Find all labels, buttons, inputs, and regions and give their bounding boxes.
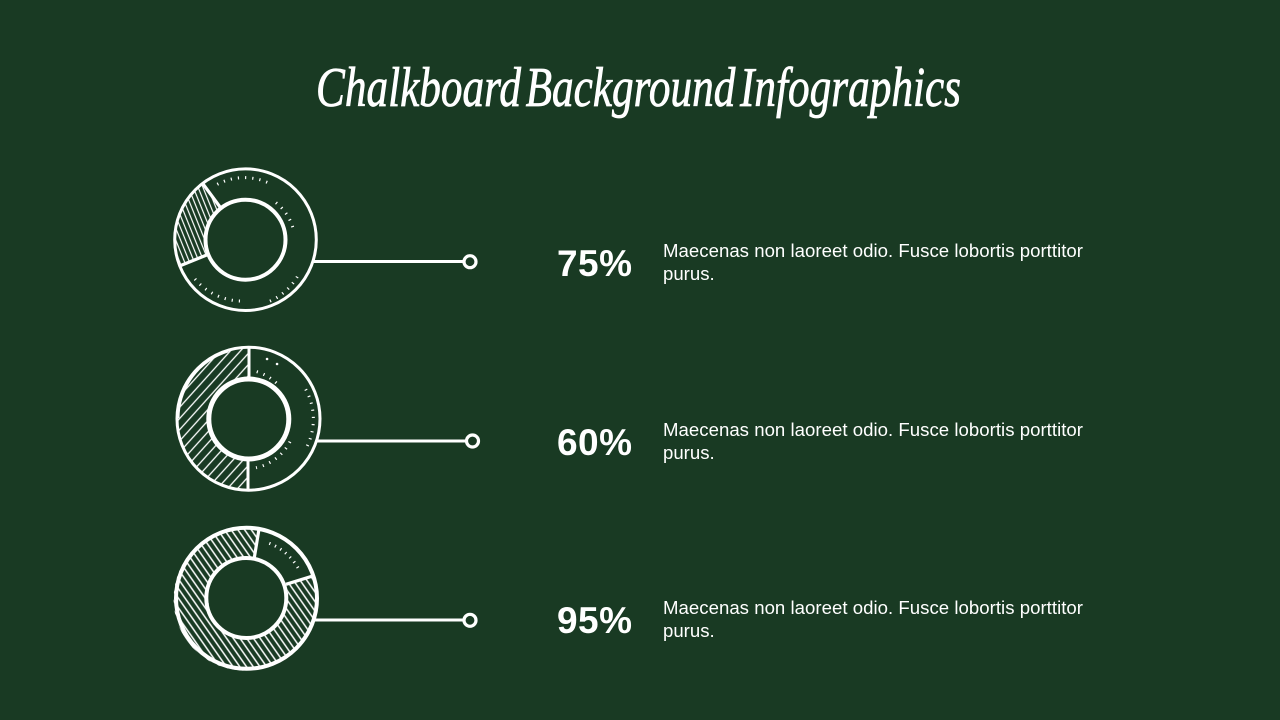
chalk specks	[256, 372, 313, 468]
row 1: 75% donut chart	[175, 169, 316, 310]
outer ring	[176, 528, 317, 669]
percentage 75%: 75%	[557, 243, 632, 284]
outer ring thick left edge	[178, 351, 228, 418]
title: Chalkboard Background Infographics	[316, 57, 961, 119]
connector line with end dot, row 3	[315, 614, 476, 626]
hatched segment 60% row	[177, 347, 249, 490]
inner ring	[209, 379, 289, 459]
hatched segment 95% row	[174, 528, 317, 671]
outer ring	[177, 347, 320, 490]
description row 3: Maecenas non laoreet odio. Fusce lobortis porttitor	[663, 597, 1083, 618]
description row 1	[663, 240, 1083, 284]
chalk specks	[269, 543, 298, 568]
percentage 95%: 95%	[557, 600, 632, 641]
connector line with end dot, row 1	[314, 256, 476, 268]
description row 3: purus.	[663, 620, 715, 641]
description row 2: purus.	[663, 442, 715, 463]
segment dividers	[254, 529, 313, 584]
connector line with end dot, row 2	[317, 435, 478, 447]
inner ring	[206, 200, 286, 280]
segment dividers	[180, 184, 220, 266]
outer ring	[175, 169, 316, 310]
percentage 60%: 60%	[557, 422, 632, 463]
description row 2	[663, 419, 1083, 463]
hatched segment 75% row	[175, 184, 220, 266]
row 3: 95% donut chart	[174, 528, 317, 671]
row 2: 60% donut chart	[177, 347, 320, 490]
description row 2: Maecenas non laoreet odio. Fusce lobortis porttitor	[663, 419, 1083, 440]
description row 3	[663, 597, 1083, 641]
inner ring	[206, 558, 286, 638]
chalk specks	[195, 178, 297, 303]
description row 1: purus.	[663, 263, 715, 284]
segment dividers	[248, 347, 249, 490]
description row 1: Maecenas non laoreet odio. Fusce lobortis porttitor	[663, 240, 1083, 261]
